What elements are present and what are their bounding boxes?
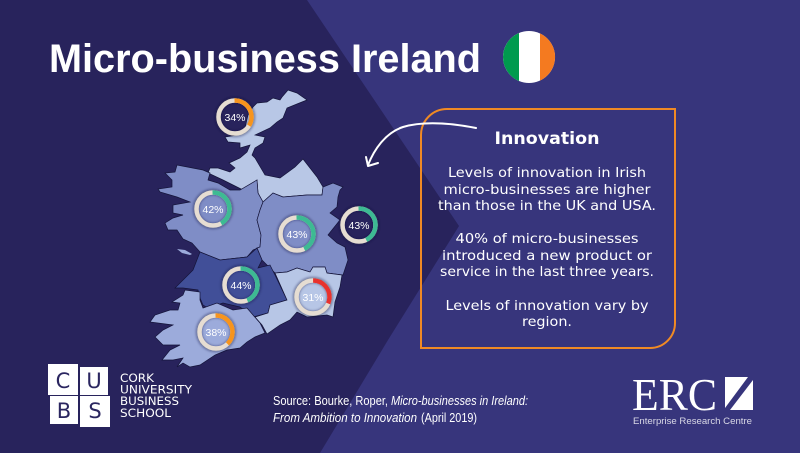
text block: paragraph 1: Levels of innovation in Irish (448, 166, 646, 181)
donut: south-east 31%: 31% (302, 292, 324, 304)
donut: south-west 38%: 38% (205, 327, 227, 339)
logo: Enterprise Research Centre: Enterprise Research Centre (633, 416, 752, 427)
source citation: (April 2019) (421, 411, 477, 425)
text block: paragraph 2: 40% of micro-businesses (456, 232, 639, 247)
logo: Cork University Business School: UNIVERSITY (120, 382, 193, 396)
logo: Cork University Business School: SCHOOL (120, 406, 172, 420)
text block: paragraph 2: service in the last three years. (440, 265, 654, 280)
region: west (158, 165, 263, 260)
region: north (208, 90, 323, 202)
donut: west 42% (196, 192, 230, 226)
text block: paragraph 1: micro-businesses are higher (444, 183, 651, 198)
map of Ireland (150, 90, 348, 367)
text block: paragraph 1: than those in the UK and USA. (438, 199, 656, 214)
logo: Enterprise Research Centre (632, 369, 753, 427)
text block: paragraph 3 (446, 299, 649, 330)
region: east (257, 183, 348, 275)
text block: paragraph 2: introduced a new product or (442, 249, 653, 264)
source citation: Source: Bourke, Roper, (273, 394, 388, 408)
donut: midlands 43%: 43% (286, 229, 308, 241)
donut: south-west 38% (199, 315, 233, 349)
donut: east 43% (342, 208, 376, 242)
source citation: From Ambition to Innovation (273, 411, 417, 425)
heading: Innovation: Innovation (494, 129, 600, 148)
text block: paragraph 1 (438, 166, 656, 214)
logo: Cork University Business School: C (56, 369, 70, 393)
arrow (366, 123, 476, 166)
donut: midlands 43% (280, 217, 314, 251)
region: south-west (150, 290, 265, 367)
source citation: Micro-businesses in Ireland: (391, 394, 528, 408)
text block: paragraph 2 (440, 232, 654, 280)
donut: west 42%: 42% (202, 204, 224, 216)
title: Micro-business Ireland (49, 37, 481, 81)
donut: north 34%: 34% (224, 112, 246, 124)
donut: mid-west 44% (224, 268, 258, 302)
region: south-east (255, 267, 342, 334)
donut: east 43%: 43% (348, 220, 370, 232)
text block: paragraph 3: Levels of innovation vary by (446, 299, 649, 314)
text block: paragraph 3: region. (522, 315, 572, 330)
logo: Cork University Business School (48, 364, 193, 427)
source citation (273, 394, 528, 425)
logo: Cork University Business School: CORK (120, 371, 154, 385)
donut: north 34% (218, 100, 252, 134)
region: mid-west (175, 248, 287, 317)
logo: Enterprise Research Centre: ERC (632, 369, 717, 420)
donut: south-east 31% (296, 280, 330, 314)
icon: Irish flag (503, 31, 555, 83)
logo: Cork University Business School: U (86, 369, 102, 393)
callout panel border (421, 109, 675, 348)
logo: Cork University Business School: BUSINESS (120, 394, 179, 408)
donut: mid-west 44%: 44% (230, 280, 252, 292)
island (177, 249, 192, 255)
logo: Cork University Business School: S (88, 399, 102, 423)
logo: Cork University Business School: B (57, 399, 71, 423)
